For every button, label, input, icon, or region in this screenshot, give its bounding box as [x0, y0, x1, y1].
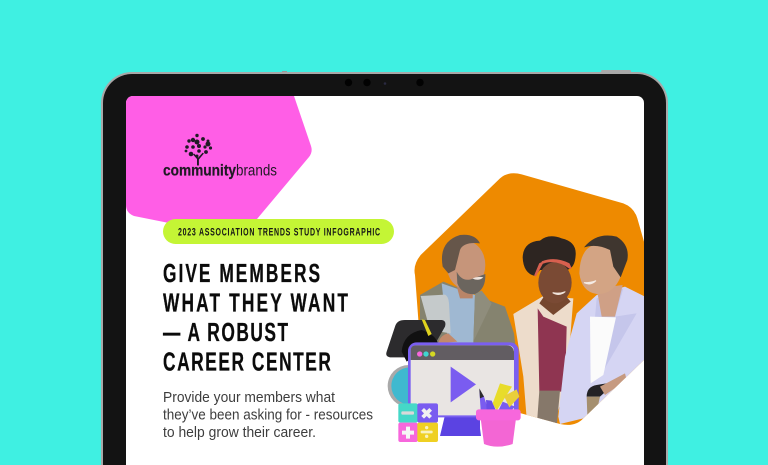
- icon: math blocks: [398, 403, 438, 442]
- icon: globe: [388, 365, 430, 407]
- logo: community brands: [163, 134, 277, 180]
- right person: [558, 235, 645, 424]
- hero illustration: [386, 170, 647, 447]
- icon: tree: [185, 134, 212, 166]
- title: — A ROBUST: [163, 318, 289, 347]
- description text: to help grow their career.: [163, 425, 316, 441]
- subtitle pill: [163, 219, 394, 244]
- description text: [163, 390, 373, 441]
- title: GIVE MEMBERS: [163, 259, 320, 288]
- title: [163, 259, 348, 377]
- woman: [513, 236, 576, 427]
- logo: community brands: brands: [236, 162, 277, 180]
- tablet device: [101, 70, 668, 465]
- icon: video monitor with play button: [408, 342, 519, 436]
- description text: Provide your members what: [163, 390, 335, 406]
- title: WHAT THEY WANT: [163, 288, 348, 318]
- pink hexagon panel: [126, 96, 312, 223]
- icon: pink pot with pencils and ruler: [476, 383, 521, 447]
- man: [420, 234, 516, 344]
- photo: three people on orange hexagon: [410, 170, 647, 433]
- description text: they’ve been asking for - resources: [163, 408, 373, 424]
- wordmark: community: [163, 162, 236, 180]
- icon: graduation cap: [386, 319, 445, 362]
- subtitle pill: 2023 ASSOCIATION TRENDS STUDY INFOGRAPHIC: [178, 225, 380, 238]
- title: CAREER CENTER: [163, 347, 331, 377]
